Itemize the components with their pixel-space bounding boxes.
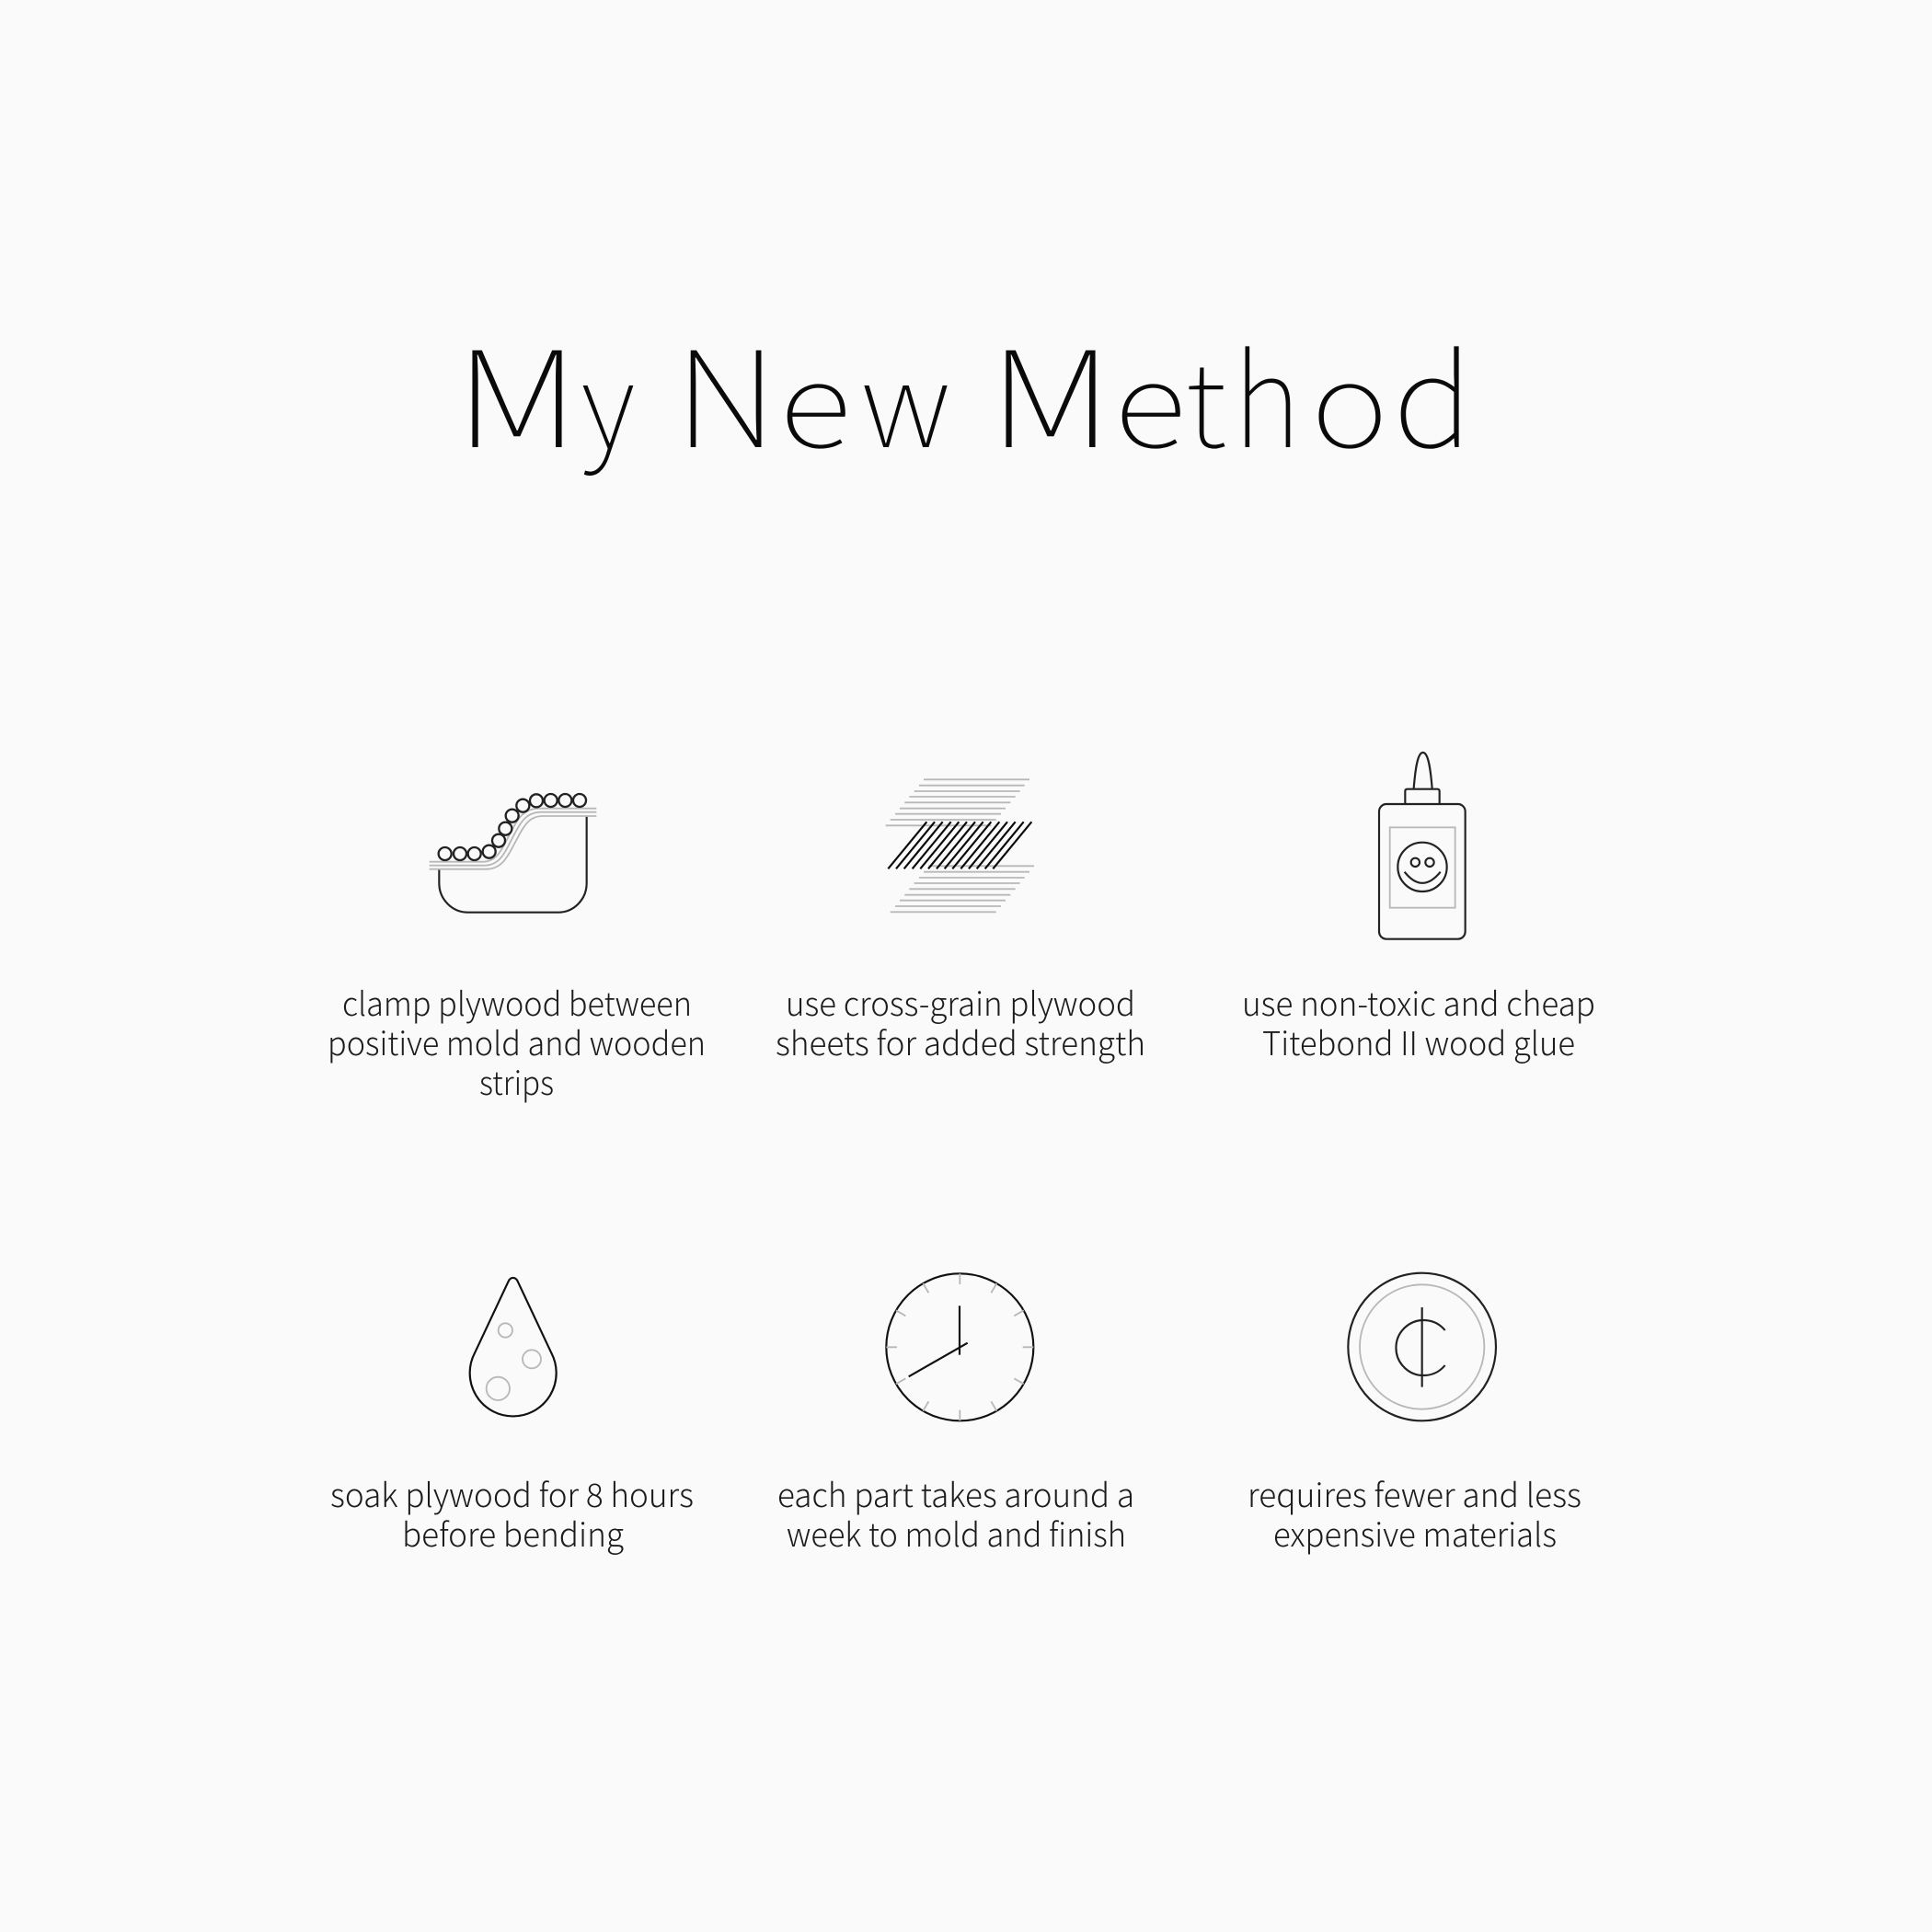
title: w [861,312,950,481]
text: clamp plywood caption: positive mold and wooden [328,1018,706,1065]
icon: water drop with bubbles [470,1278,557,1416]
text: clamp plywood caption: strips [479,1058,554,1105]
title: e [779,312,851,481]
title: M [454,293,580,486]
panel: wood glue [1242,753,1603,1065]
icon: cent coin [1348,1273,1496,1420]
title: t [1185,312,1226,481]
text: soak caption: before bending [402,1510,624,1557]
title: N [674,293,777,486]
title: y [581,312,635,481]
icon: mold with clamped plywood and wooden strips [430,794,596,913]
text: soak caption: soak plywood for 8 hours [330,1470,694,1517]
title: e [1114,312,1186,481]
title: d [1393,300,1473,484]
panel: cross-grain plywood [776,779,1145,1065]
text: materials caption: expensive materials [1273,1510,1557,1557]
title: h [1233,300,1301,484]
panel: cheaper materials [1248,1273,1589,1557]
panel: soak plywood [330,1278,701,1557]
text: materials caption: requires fewer and less [1248,1470,1581,1517]
icon: glue bottle with smiley label [1379,753,1466,939]
text: time caption: week to mold and finish [787,1510,1126,1557]
text: wood glue caption: use non-toxic and cheap [1242,979,1595,1026]
text: clamp plywood caption: clamp plywood between [342,979,692,1026]
icon: cross-grain plywood sheets [886,779,1034,912]
panel: clamp plywood [328,794,713,1105]
title: M [988,293,1113,486]
text: time caption: each part takes around a [777,1470,1134,1517]
title: o [1311,312,1388,481]
panel: time per part [777,1273,1142,1557]
icon: clock [886,1273,1033,1420]
text: wood glue caption: Titebond II wood glue [1262,1018,1575,1065]
text: cross-grain caption: use cross-grain plywood [786,979,1135,1026]
text: cross-grain caption: sheets for added strength [776,1018,1145,1065]
